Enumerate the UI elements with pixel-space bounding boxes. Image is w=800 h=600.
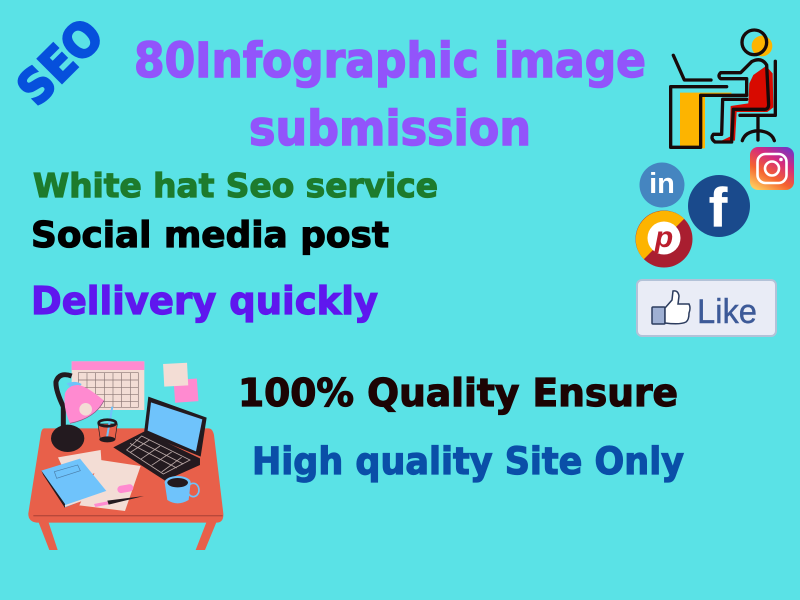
subtitle: white hat: White hat Seo service: [33, 166, 438, 205]
lamp: [51, 375, 104, 452]
icon: pinterest: [636, 210, 692, 268]
like label: Like: [697, 293, 757, 331]
calendar: [72, 361, 144, 410]
laptop: [113, 397, 207, 481]
cup of pens: [98, 407, 117, 442]
text: delivery: Dellivery quickly: [31, 279, 378, 323]
text: social media post: Social media post: [31, 215, 389, 256]
coffee mug: [165, 476, 199, 503]
icon: person at desk: [671, 30, 775, 148]
icon: facebook: f: [709, 176, 728, 238]
title: submission: [249, 101, 531, 157]
sticky notes: [163, 363, 198, 403]
papers: [58, 450, 141, 511]
pen: [94, 496, 144, 507]
icon: thumbs up: [652, 291, 690, 324]
icon: instagram: [750, 147, 794, 190]
icon: facebook: [688, 175, 750, 238]
title: 80Infographic image: [134, 33, 646, 89]
icon: linkedin: in: [649, 168, 675, 200]
icon: pinterest: p: [654, 221, 673, 254]
like button: [637, 280, 776, 336]
SEO badge text: SEO: [7, 8, 115, 116]
illustration: desk with laptop and lamp: [28, 361, 223, 550]
notebook: [41, 459, 107, 508]
icon: linkedin: [640, 162, 684, 208]
text: high quality: High quality Site Only: [252, 440, 684, 483]
title: [134, 33, 646, 157]
desk: [28, 428, 223, 550]
text: quality ensure: 100% Quality Ensure: [238, 371, 678, 415]
